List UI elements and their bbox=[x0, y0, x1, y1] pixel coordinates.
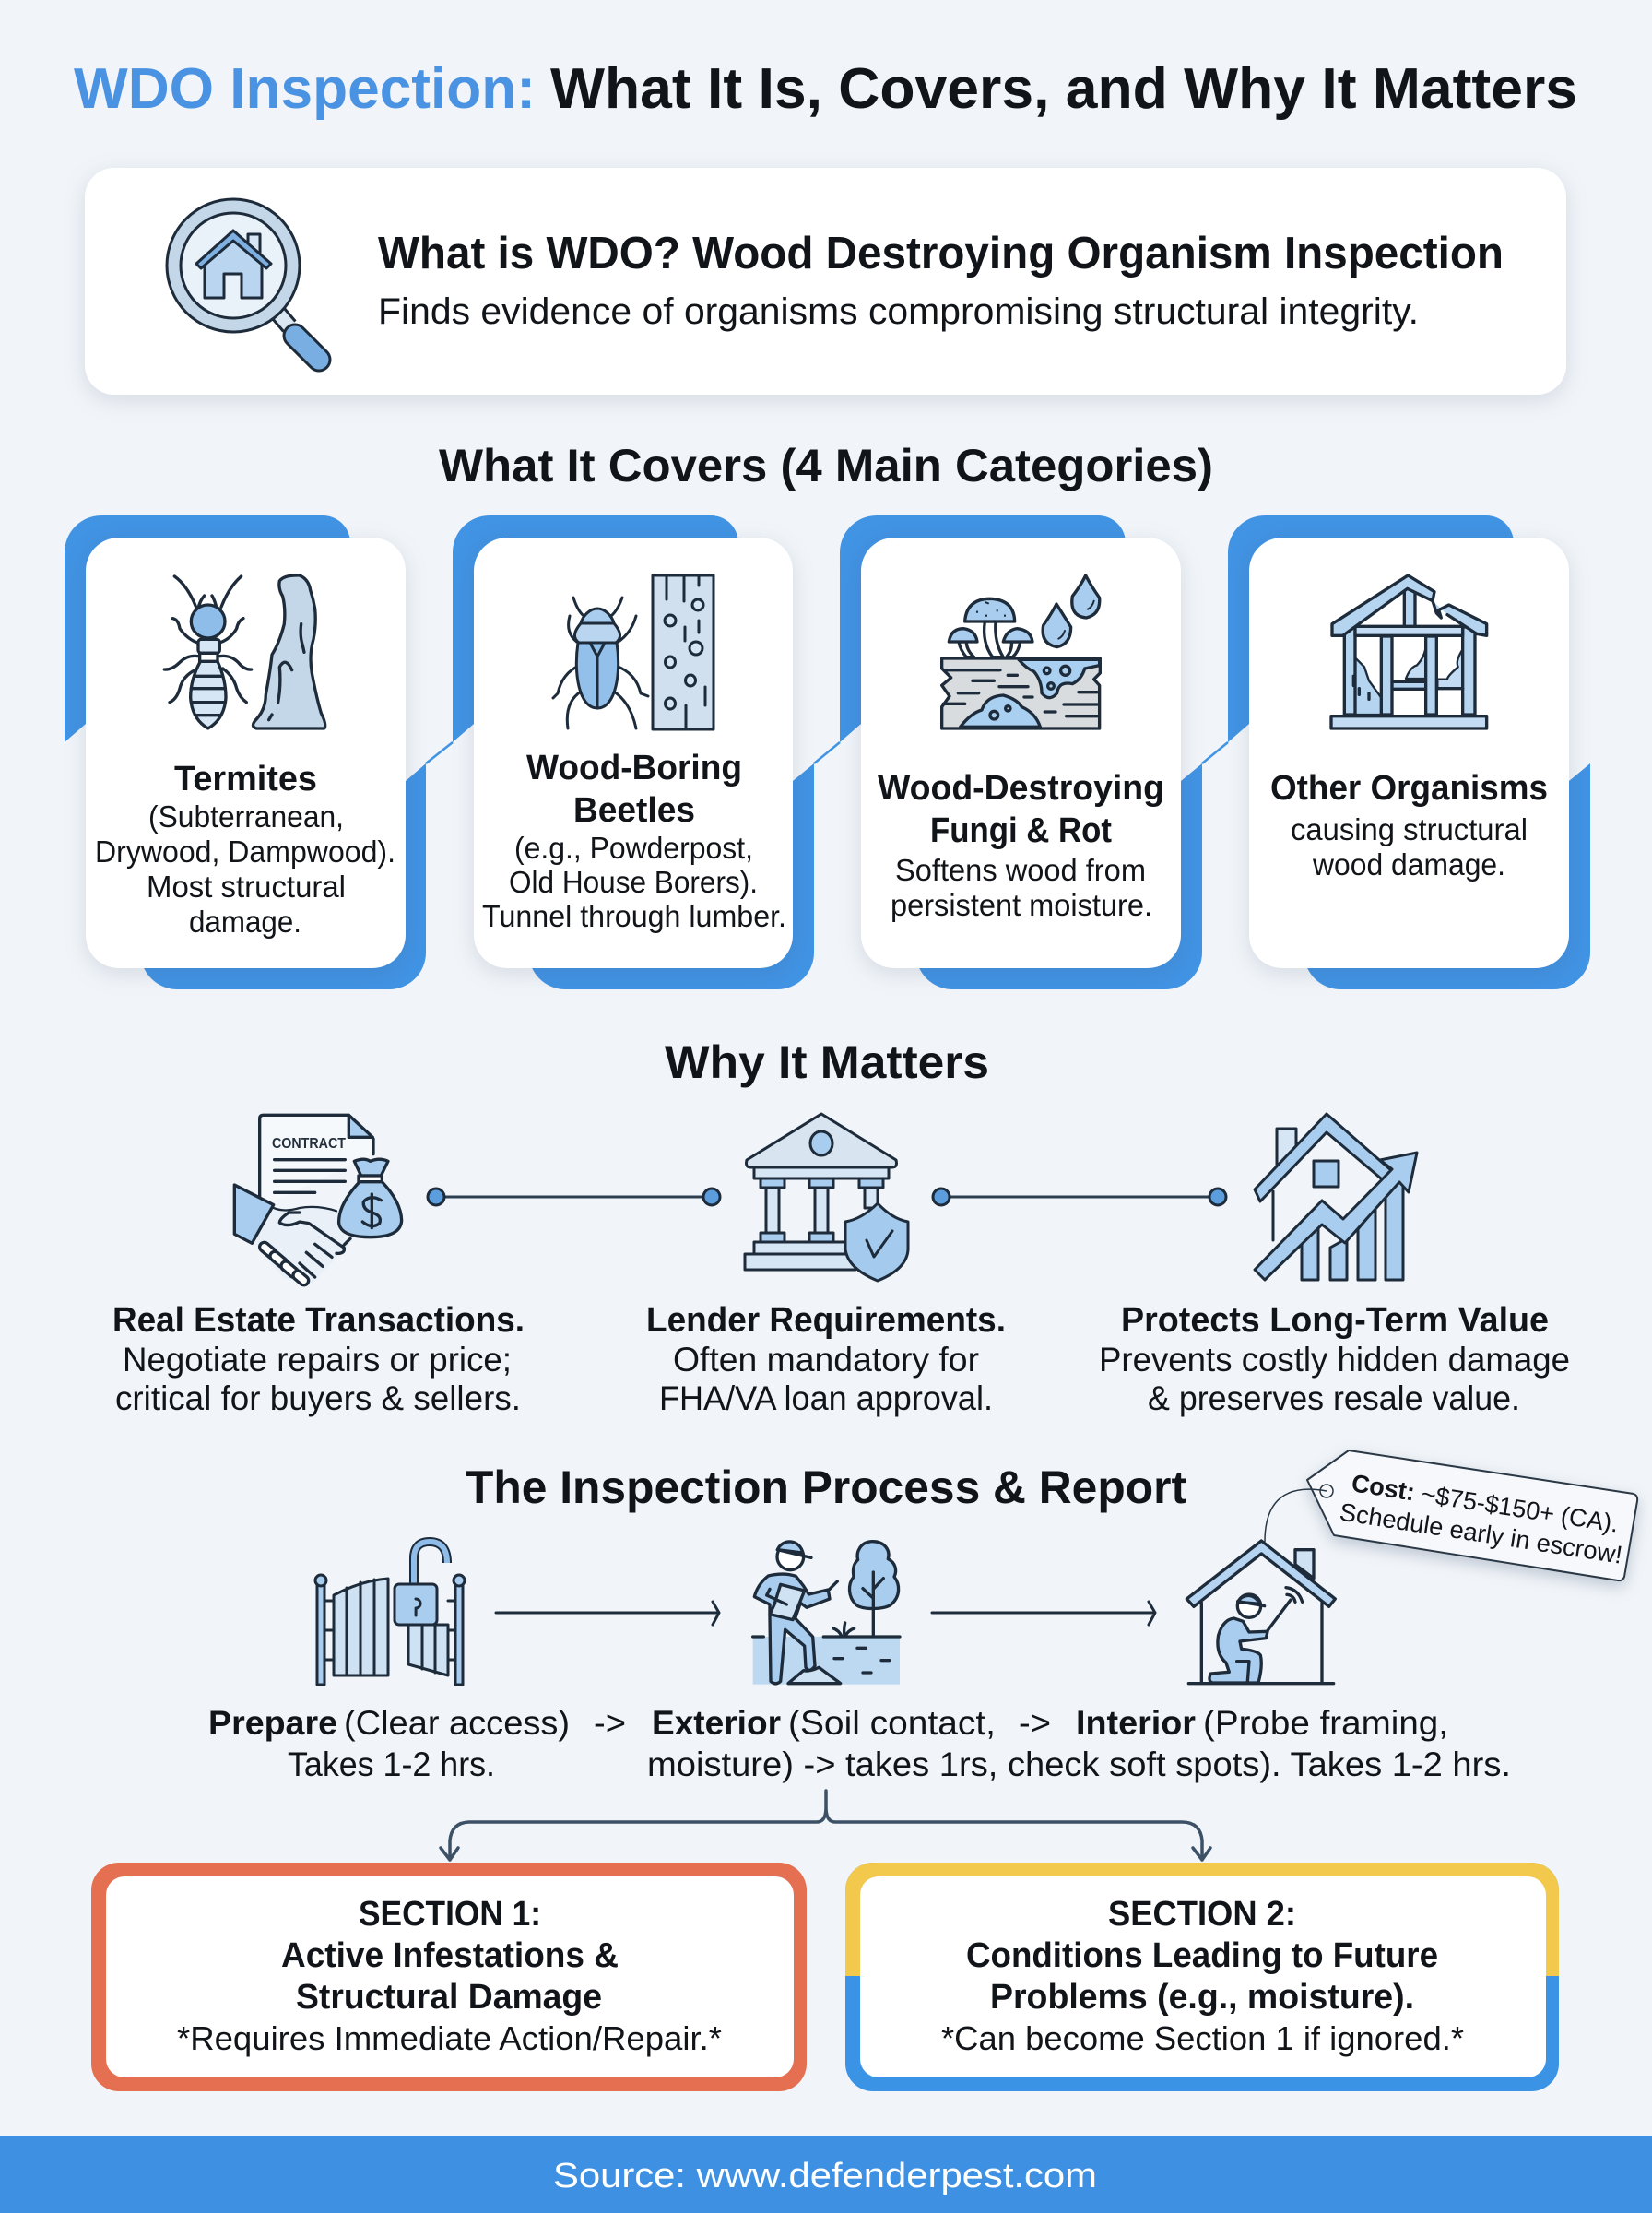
card description: Tunnel through lumber. bbox=[482, 899, 786, 933]
panel: what is WDO bbox=[85, 168, 1566, 395]
card description: (Subterranean, bbox=[148, 799, 344, 834]
text: real estate transactions: Negotiate repairs or price; bbox=[123, 1341, 512, 1379]
panel: other organisms bbox=[1202, 515, 1590, 989]
card description: persistent moisture. bbox=[891, 888, 1152, 922]
panel: termites bbox=[65, 515, 426, 989]
tag text: Schedule early in escrow! bbox=[1338, 1497, 1624, 1569]
icon: inspector inside house bbox=[1186, 1541, 1335, 1684]
heading: What is WDO? Wood Destroying Organism Inspection bbox=[378, 229, 1504, 278]
title: WDO Inspection: bbox=[74, 57, 536, 121]
section 2 text: Problems (e.g., moisture). bbox=[990, 1978, 1414, 2017]
text: process steps: (Soil contact, bbox=[788, 1704, 996, 1742]
card description: Drywood, Dampwood). bbox=[95, 834, 395, 869]
section 1 text: Structural Damage bbox=[296, 1978, 602, 2017]
section 1 text: Active Infestations & bbox=[281, 1936, 619, 1975]
icon: inspector outdoors bbox=[753, 1542, 900, 1685]
icon: contract, handshake and money bag bbox=[234, 1115, 402, 1287]
callout: cost tag bbox=[1265, 1450, 1637, 1580]
section 2 text bbox=[941, 1895, 1464, 2057]
icon: fungi on wet wood bbox=[942, 575, 1100, 728]
icon: damaged house frame bbox=[1331, 575, 1487, 728]
text: real estate transactions: Real Estate Transactions. bbox=[112, 1301, 525, 1340]
connector bbox=[428, 1189, 720, 1205]
card title bbox=[878, 769, 1164, 850]
icon: open gate with padlock bbox=[315, 1542, 465, 1685]
card title bbox=[526, 749, 742, 830]
arrow bbox=[932, 1602, 1155, 1625]
description: Finds evidence of organisms compromising structural integrity. bbox=[378, 291, 1419, 332]
section 1 text: SECTION 1: bbox=[359, 1895, 541, 1934]
section 2 text: Conditions Leading to Future bbox=[966, 1936, 1438, 1975]
section 2 text: SECTION 2: bbox=[1108, 1895, 1296, 1934]
text: protects long-term value: Prevents costly hidden damage bbox=[1099, 1341, 1570, 1379]
tag text: Cost: ~$75-$150+ (CA). bbox=[1350, 1469, 1621, 1538]
text: process steps: moisture) -> takes 1rs, check soft spots). Takes 1-2 hrs. bbox=[647, 1746, 1511, 1783]
text: process steps: (Clear access) bbox=[344, 1704, 570, 1742]
card description: causing structural bbox=[1291, 812, 1528, 846]
text: process steps: Exterior bbox=[652, 1704, 781, 1742]
card description: damage. bbox=[189, 905, 301, 939]
text: protects long-term value: Protects Long-Term Value bbox=[1121, 1301, 1549, 1340]
icon: house with rising chart bbox=[1255, 1114, 1417, 1280]
title: What It Is, Covers, and Why It Matters bbox=[550, 57, 1577, 121]
footer bbox=[0, 2136, 1652, 2213]
text: lender requirements: Lender Requirements. bbox=[646, 1301, 1006, 1340]
card description bbox=[482, 831, 786, 933]
heading: why it matters: Why It Matters bbox=[665, 1036, 989, 1088]
text: lender requirements: Often mandatory for bbox=[673, 1341, 979, 1379]
icon: termite and mud tube bbox=[164, 575, 325, 728]
card description bbox=[95, 799, 395, 939]
text: lender requirements: FHA/VA loan approval. bbox=[659, 1379, 993, 1417]
card title: Wood-Destroying bbox=[878, 769, 1164, 808]
section 2 text: *Can become Section 1 if ignored.* bbox=[941, 2019, 1464, 2057]
card description: (e.g., Powderpost, bbox=[514, 831, 753, 865]
text: process steps: Prepare bbox=[208, 1704, 337, 1742]
text: process steps: (Probe framing, bbox=[1203, 1704, 1448, 1742]
text: process steps bbox=[208, 1704, 1511, 1783]
icon: magnifying glass over house bbox=[167, 199, 319, 360]
icon: bank with shield bbox=[745, 1114, 908, 1281]
panel: section 1 bbox=[91, 1863, 807, 2091]
arrow bbox=[496, 1602, 719, 1625]
text: real estate transactions: critical for buyers & sellers. bbox=[115, 1379, 521, 1417]
text: process steps: -> bbox=[594, 1704, 626, 1742]
title bbox=[74, 57, 1577, 121]
text: process steps: -> bbox=[1019, 1704, 1051, 1742]
card title: Beetles bbox=[573, 791, 695, 830]
icon: contract, handshake and money bag: CONTRACT bbox=[272, 1136, 347, 1152]
panel: beetles bbox=[426, 515, 814, 989]
connector bbox=[933, 1189, 1226, 1205]
panel: fungi bbox=[814, 515, 1202, 989]
text: protects long-term value bbox=[1099, 1301, 1570, 1417]
section 1 text bbox=[177, 1895, 722, 2057]
heading: what it covers: What It Covers (4 Main Categories) bbox=[439, 440, 1213, 491]
card description bbox=[1291, 812, 1528, 882]
text: process steps: Interior bbox=[1076, 1704, 1196, 1742]
card description: wood damage. bbox=[1312, 847, 1505, 882]
card description: Old House Borers). bbox=[509, 865, 758, 899]
card title: Fungi & Rot bbox=[930, 811, 1112, 850]
heading: inspection process: The Inspection Process & Report bbox=[466, 1462, 1186, 1513]
card title: Other Organisms bbox=[1270, 769, 1548, 808]
text: real estate transactions bbox=[112, 1301, 525, 1417]
text: lender requirements bbox=[646, 1301, 1006, 1417]
card title: Wood-Boring bbox=[526, 749, 742, 787]
section 1 text: *Requires Immediate Action/Repair.* bbox=[177, 2019, 722, 2057]
card description: Softens wood from bbox=[895, 853, 1146, 887]
text: process steps: Takes 1-2 hrs. bbox=[288, 1746, 495, 1783]
card description: Most structural bbox=[147, 870, 346, 904]
panel: section 2 bbox=[845, 1863, 1559, 2091]
card description bbox=[891, 853, 1152, 922]
card title: Termites bbox=[174, 760, 317, 799]
bracket arrows to report sections bbox=[441, 1791, 1210, 1860]
text: protects long-term value: & preserves resale value. bbox=[1148, 1379, 1520, 1417]
icon: beetle and bored wood bbox=[553, 575, 714, 729]
footer: Source: www.defenderpest.com bbox=[553, 2157, 1097, 2195]
